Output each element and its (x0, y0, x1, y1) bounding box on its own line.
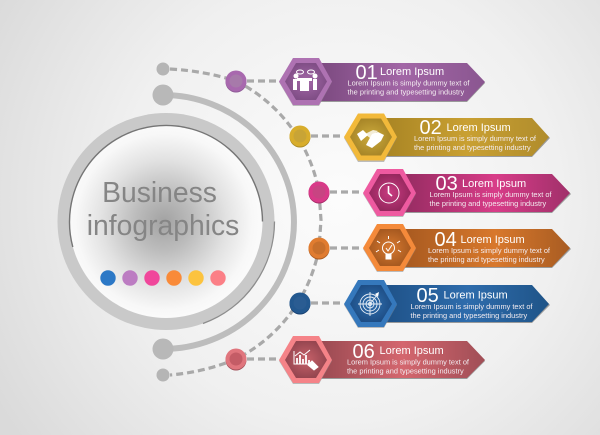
text 02: the printing and typesetting industry (414, 143, 531, 152)
node 03 (308, 182, 330, 204)
text 02 (414, 117, 537, 152)
text 06: Lorem Ipsum (380, 345, 444, 357)
text 05: Lorem Ipsum (444, 290, 508, 302)
text 04: Lorem Ipsum (460, 234, 525, 246)
text 03: 03 (436, 173, 458, 195)
icon: light bulb (376, 236, 401, 259)
text 06 (347, 341, 470, 376)
hexagon 03 (363, 169, 416, 217)
text 01: Lorem Ipsum is simply dummy text of (348, 78, 470, 88)
icon: handshake (357, 130, 384, 148)
node 06 (226, 348, 246, 370)
text 01: the printing and typesetting industry (348, 88, 464, 96)
icon: meeting (293, 70, 318, 91)
colour dots (100, 270, 226, 286)
text 06: the printing and typesetting industry (347, 366, 464, 376)
text 02: 02 (420, 117, 442, 139)
text 01: Lorem Ipsum (380, 66, 444, 78)
text 06: 06 (352, 341, 375, 363)
heading: Business (102, 176, 217, 208)
panel 04 (363, 224, 571, 272)
text 02: Lorem Ipsum is simply dummy text of (414, 134, 537, 143)
text 01: 01 (356, 62, 378, 84)
hexagon 02 (344, 114, 397, 162)
text 05: 05 (416, 285, 439, 307)
text 04: the printing and typesetting industry (428, 255, 545, 264)
panel 01 (279, 58, 485, 106)
panel 03 (363, 169, 571, 217)
text 04: Lorem Ipsum is simply dummy text of (428, 246, 551, 255)
text 04: 04 (434, 229, 457, 251)
node 05 (290, 292, 310, 314)
dashed timeline arc (170, 69, 363, 375)
text 05 (410, 285, 533, 320)
middle grey arc (152, 84, 294, 360)
icon: clock (379, 183, 399, 203)
text 03: the printing and typesetting industry (430, 199, 546, 208)
hexagon 04 (363, 224, 416, 272)
hexagon 06 (279, 336, 332, 384)
text 05: Lorem Ipsum is simply dummy text of (410, 302, 533, 311)
dashed arc end caps (156, 62, 170, 382)
text 01 (348, 62, 470, 96)
icon: target (358, 292, 382, 316)
panel 05 (344, 280, 550, 328)
text 03 (430, 173, 552, 208)
icon: chart (294, 350, 318, 370)
panel 06 (279, 336, 485, 384)
node 04 (308, 238, 330, 260)
text 04 (428, 229, 551, 264)
heading (87, 176, 239, 241)
text 05: the printing and typesetting industry (410, 311, 527, 320)
panel 02 (344, 114, 550, 162)
text 03: Lorem Ipsum (462, 178, 526, 190)
text 02: Lorem Ipsum (446, 122, 511, 134)
node 02 (290, 126, 310, 148)
heading: infographics (87, 209, 239, 241)
text 03: Lorem Ipsum is simply dummy text of (430, 190, 552, 199)
node 01 (226, 70, 246, 92)
central circle (58, 113, 274, 330)
hexagon 05 (344, 280, 397, 328)
text 06: Lorem Ipsum is simply dummy text of (347, 358, 470, 366)
hexagon 01 (279, 58, 332, 106)
